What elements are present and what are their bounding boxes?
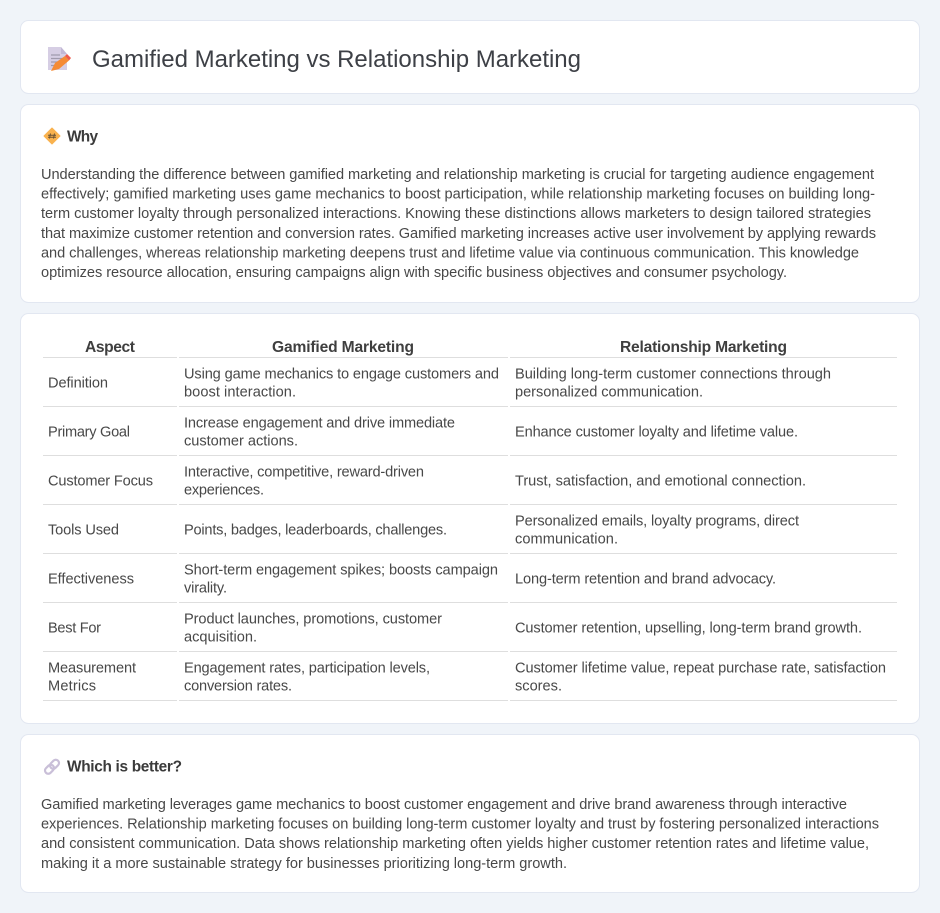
table row: customer focus: Interactive, competitive, reward-driven (184, 464, 424, 480)
table row: best for: acquisition. (184, 630, 257, 646)
table row: effectiveness: Effectiveness (48, 572, 134, 588)
icon: orange diamond sign (44, 128, 60, 144)
text block: why paragraph: Understanding the difference between gamified marketing and relationship marketing is crucial for targeting audience engagement (41, 167, 874, 183)
table header row (43, 339, 897, 358)
text block: why paragraph: optimizes resource allocation, ensuring campaigns align with specific business objectives and consumer psychology. (41, 265, 787, 281)
table row: effectiveness: Long-term retention and brand advocacy. (515, 572, 776, 588)
table row: best for (43, 612, 897, 652)
icon: document with pencil (48, 47, 71, 71)
table row: tools used: Personalized emails, loyalty programs, direct (515, 514, 799, 530)
table header row: Aspect (85, 339, 135, 356)
text block: which is better paragraph: making it a more sustainable strategy for businesses prioritizing long-term growth. (41, 856, 567, 872)
table row: measurement metrics: Customer lifetime value, repeat purchase rate, satisfaction (515, 660, 886, 676)
table row: measurement metrics: scores. (515, 678, 562, 694)
text block: why paragraph: and challenges, whereas relationship marketing deepens trust and lifetime value via continuous communication. This knowledge (41, 245, 859, 261)
text block: why paragraph: effectively; gamified marketing uses game mechanics to boost participation, while relationship marketing focuses on building long- (41, 187, 875, 203)
panel: which is better (20, 734, 920, 892)
table row: tools used (43, 514, 897, 554)
table row: customer focus (43, 464, 897, 505)
text block: why paragraph: term customer loyalty through personalized interactions. Knowing these distinctions allows marketers to design tailored strategies (41, 206, 871, 222)
table row: customer focus: experiences. (184, 482, 264, 498)
table row: customer focus: Customer Focus (48, 474, 153, 490)
table row: measurement metrics: Engagement rates, participation levels, (184, 660, 430, 676)
table row: tools used: Tools Used (48, 522, 119, 538)
text block: which is better paragraph: Gamified marketing leverages game mechanics to boost customer engagement and drive brand awareness through interactive (41, 797, 847, 813)
text block: why paragraph (41, 167, 876, 281)
table row: primary goal (43, 416, 897, 456)
table row: measurement metrics: Metrics (48, 678, 96, 694)
table row: primary goal: Increase engagement and drive immediate (184, 416, 455, 432)
text block: which is better paragraph: experiences. Relationship marketing focuses on building long-term customer loyalty and trust by fostering personalized interactions (41, 817, 879, 833)
table row: definition: personalized communication. (515, 384, 703, 400)
panel: title header (20, 20, 920, 94)
table row: best for: Best For (48, 620, 101, 636)
table row: tools used: Points, badges, leaderboards, challenges. (184, 522, 447, 538)
table row: primary goal: customer actions. (184, 434, 298, 450)
table row: definition: Using game mechanics to engage customers and (184, 366, 499, 382)
table row: definition (43, 366, 897, 407)
text block: why paragraph: that maximize customer retention and conversion rates. Gamified marketing increases active user involvement by applying rewards (41, 226, 876, 242)
table row: definition: boost interaction. (184, 384, 296, 400)
table row: definition: Building long-term customer connections through (515, 366, 831, 382)
title: Gamified Marketing vs Relationship Marketing (92, 46, 581, 73)
table row: effectiveness: Short-term engagement spikes; boosts campaign (184, 562, 498, 578)
table row: definition: Definition (48, 376, 108, 392)
table row: primary goal: Primary Goal (48, 424, 130, 440)
table row: measurement metrics: conversion rates. (184, 678, 292, 694)
table row: effectiveness: virality. (184, 580, 227, 596)
table row: tools used: communication. (515, 532, 618, 548)
table header row: Gamified Marketing (272, 339, 414, 356)
text block: which is better paragraph: and consistent communication. Data shows relationship marketing often yields higher customer retention rates and lifetime value, (41, 836, 869, 852)
table header row: Relationship Marketing (620, 339, 787, 356)
table row: effectiveness (43, 562, 897, 603)
table row: customer focus: Trust, satisfaction, and emotional connection. (515, 474, 806, 490)
table row: measurement metrics: Measurement (48, 660, 136, 676)
heading: why: Why (67, 128, 98, 146)
text block: which is better paragraph (41, 797, 879, 872)
panel: comparison table (20, 314, 920, 724)
table row: best for: Customer retention, upselling, long-term brand growth. (515, 620, 862, 636)
panel: why (20, 104, 920, 302)
table row: best for: Product launches, promotions, customer (184, 612, 442, 628)
heading: which is better: Which is better? (67, 758, 182, 776)
table row: primary goal: Enhance customer loyalty and lifetime value. (515, 424, 798, 440)
table row: measurement metrics (43, 660, 897, 701)
icon: chain link (44, 758, 60, 775)
